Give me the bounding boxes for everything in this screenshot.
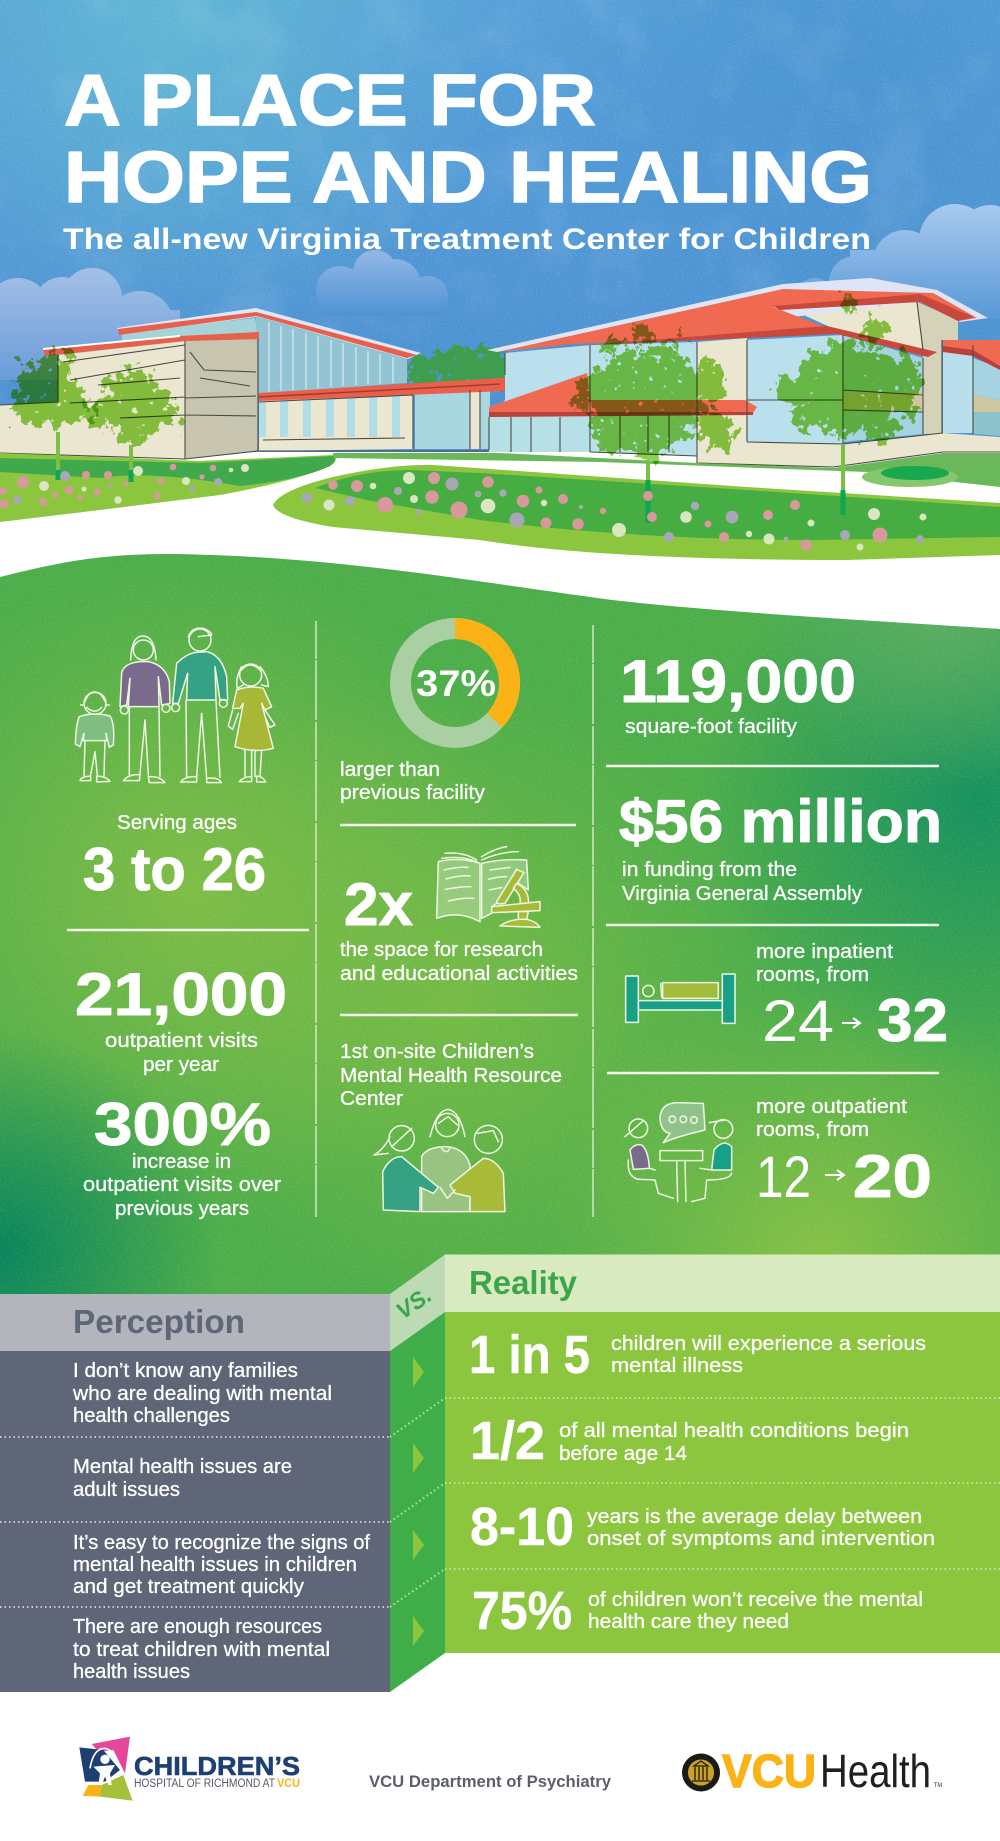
text: more inpatient rooms: rooms, from bbox=[756, 964, 869, 986]
clouds bbox=[0, 204, 1000, 380]
right hill bbox=[862, 466, 958, 487]
white ground bbox=[0, 452, 1000, 642]
panel: reality bbox=[445, 1254, 1000, 1653]
versus label: VS. bbox=[391, 1282, 436, 1324]
text: VCU Department of Psychiatry: VCU Department of Psychiatry bbox=[369, 1773, 612, 1791]
subtitle: The all-new Virginia Treatment Center for Children bbox=[63, 223, 871, 256]
reality header bbox=[445, 1254, 1000, 1312]
title bbox=[64, 61, 872, 218]
title: HOPE AND HEALING bbox=[64, 138, 872, 218]
stat: 12 to 20: 12 bbox=[756, 1145, 811, 1210]
perception body bbox=[0, 1351, 390, 1692]
left lawn bbox=[0, 453, 336, 522]
white lower background bbox=[0, 1692, 1000, 1841]
reality body: 1/2 bbox=[470, 1411, 545, 1471]
perception body: and get treatment quickly bbox=[73, 1576, 304, 1598]
stat: 12 to 20: 20 bbox=[853, 1143, 932, 1210]
footer logos bbox=[79, 1737, 942, 1801]
logo: VCU Health: VCU bbox=[722, 1745, 816, 1797]
text: more inpatient rooms bbox=[756, 941, 893, 986]
donut chart: 37% bbox=[400, 628, 510, 738]
text: serving ages: Serving ages bbox=[117, 812, 237, 834]
left building bbox=[0, 308, 421, 459]
stat: 3 to 26: 3 to 26 bbox=[83, 836, 266, 903]
reality body: onset of symptoms and intervention bbox=[587, 1528, 935, 1550]
logo: Children's Hospital: CHILDREN’S bbox=[134, 1751, 300, 1781]
reality body: of children won’t receive the mental bbox=[588, 1589, 923, 1611]
perception body: There are enough resources bbox=[73, 1616, 322, 1638]
logo: Children's Hospital: HOSPITAL OF RICHMOND AT bbox=[134, 1778, 275, 1790]
title: A PLACE FOR bbox=[64, 61, 596, 141]
perception body: Mental health issues are bbox=[73, 1456, 292, 1478]
reality body: health care they need bbox=[588, 1611, 789, 1633]
sky background bbox=[0, 0, 1000, 470]
stat: $56 million: $56 million bbox=[619, 788, 942, 855]
text: resource center: Center bbox=[340, 1088, 403, 1110]
text: outpatient visits: per year bbox=[143, 1054, 219, 1076]
text: larger than previous: previous facility bbox=[340, 782, 485, 804]
trees bbox=[13, 295, 920, 523]
logo: Children's Hospital: VCU bbox=[277, 1778, 300, 1790]
panel: green statistics bbox=[0, 554, 1000, 1300]
text: resource center: Mental Health Resource bbox=[340, 1065, 562, 1087]
reality body: 75% bbox=[472, 1581, 572, 1641]
reality body: 1 in 5 bbox=[469, 1325, 590, 1385]
perception body: to treat children with mental bbox=[73, 1639, 330, 1661]
flower dots bbox=[0, 464, 926, 550]
text: more outpatient rooms: more outpatient bbox=[756, 1096, 907, 1118]
right building bbox=[487, 278, 1000, 467]
text: space for research: the space for research bbox=[340, 939, 543, 961]
perception body: I don’t know any families bbox=[73, 1360, 298, 1382]
versus connector band bbox=[390, 1254, 445, 1692]
arrow markers bbox=[413, 1357, 424, 1646]
stat: 24 to 32: 32 bbox=[877, 987, 948, 1054]
text: square-foot facility: square-foot facility bbox=[625, 716, 797, 738]
text: funding source: Virginia General Assembly bbox=[622, 883, 862, 905]
text: funding source bbox=[622, 859, 862, 905]
perception body: mental health issues in children bbox=[73, 1554, 357, 1576]
text: funding source: in funding from the bbox=[622, 859, 797, 881]
text: outpatient visits bbox=[105, 1030, 258, 1076]
text: larger than previous: larger than bbox=[340, 759, 440, 781]
stat: 24 to 32: 24 bbox=[762, 989, 834, 1054]
text: more outpatient rooms: rooms, from bbox=[756, 1119, 869, 1141]
donut chart: 37%: 37% bbox=[416, 663, 496, 704]
stat: 2x: 2x bbox=[344, 871, 413, 938]
stat: 24 to 32 bbox=[762, 987, 948, 1054]
perception body: health issues bbox=[73, 1661, 190, 1683]
icon: book and microscope bbox=[437, 847, 540, 927]
lawn strip behind path bbox=[333, 453, 1000, 487]
reality body: 8-10 bbox=[470, 1497, 574, 1557]
center wing bbox=[259, 374, 585, 451]
logo: VCU Health: Health bbox=[820, 1745, 931, 1797]
logo: VCU Health: TM bbox=[934, 1783, 942, 1789]
reality body: children will experience a serious bbox=[611, 1333, 926, 1355]
reality body: before age 14 bbox=[559, 1443, 687, 1465]
reality body: mental illness bbox=[611, 1355, 743, 1377]
text: larger than previous bbox=[340, 759, 485, 804]
text: more outpatient rooms bbox=[756, 1096, 907, 1141]
text: space for research: and educational activities bbox=[340, 963, 578, 985]
stat: 12 to 20 bbox=[756, 1143, 932, 1210]
text: increase in visits: outpatient visits over bbox=[83, 1174, 281, 1196]
stat: 119,000: 119,000 bbox=[620, 648, 856, 715]
text: increase in visits: previous years bbox=[115, 1198, 249, 1220]
background trees bbox=[408, 346, 515, 384]
icon: family bbox=[75, 628, 275, 783]
panel: perception bbox=[0, 1294, 390, 1692]
perception header: Perception bbox=[73, 1303, 245, 1340]
logo: Children's Hospital bbox=[79, 1737, 300, 1801]
logo: VCU Health bbox=[682, 1745, 942, 1797]
stat: 21,000: 21,000 bbox=[75, 961, 287, 1028]
icon: counseling conversation bbox=[625, 1103, 733, 1202]
perception body: who are dealing with mental bbox=[72, 1383, 332, 1405]
icon: bed bbox=[626, 974, 735, 1023]
reality body: of all mental health conditions begin bbox=[559, 1420, 909, 1442]
perception body: adult issues bbox=[73, 1479, 180, 1501]
text: resource center bbox=[340, 1041, 562, 1110]
reality body bbox=[445, 1312, 1000, 1653]
perception header bbox=[0, 1294, 390, 1351]
text: resource center: 1st on-site Children’s bbox=[340, 1041, 534, 1063]
island lawn bbox=[273, 465, 1000, 560]
text: space for research bbox=[340, 939, 578, 985]
icon: three people embracing bbox=[374, 1109, 505, 1212]
perception body: health challenges bbox=[73, 1405, 230, 1427]
reality header: Reality bbox=[469, 1264, 578, 1301]
perception body: It’s easy to recognize the signs of bbox=[73, 1532, 370, 1554]
hero panel: sky, title and building bbox=[0, 0, 1000, 642]
text: outpatient visits: outpatient visits bbox=[105, 1030, 258, 1052]
text: increase in visits bbox=[83, 1151, 281, 1220]
green textured background bbox=[0, 554, 1000, 1300]
text: more inpatient rooms: more inpatient bbox=[756, 941, 893, 963]
stat: 300%: 300% bbox=[94, 1091, 271, 1158]
text: increase in visits: increase in bbox=[132, 1151, 231, 1173]
reality body: years is the average delay between bbox=[587, 1506, 922, 1528]
